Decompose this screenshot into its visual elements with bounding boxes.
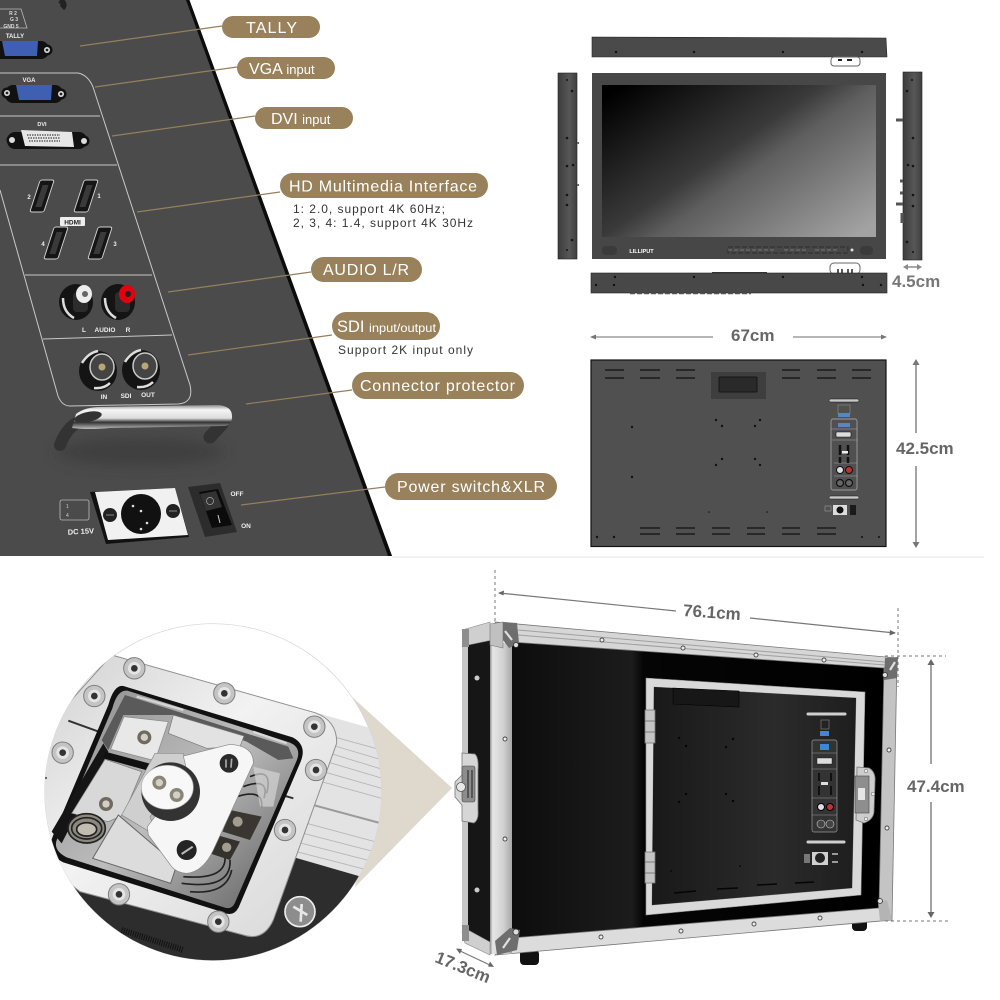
dimension: width 67cm: 67cm <box>731 326 774 345</box>
case side face <box>462 622 492 955</box>
callout: VGA input: VGA input <box>249 61 315 78</box>
connector group: SDI BNC <box>79 350 160 401</box>
dimension: case width 76.1cm <box>495 570 898 687</box>
panel: monitor left edge view <box>558 73 579 259</box>
black gap bar <box>104 752 149 770</box>
dark spring cavities <box>212 767 280 860</box>
panel: monitor front view <box>592 73 886 259</box>
icon: power rocker switch: OFF <box>230 491 244 498</box>
pointer: zoom wedge from latch to detail circle <box>350 695 452 887</box>
connector: VGA port: VGA <box>22 78 36 84</box>
case corners <box>490 622 898 955</box>
dimension: depth 4.5cm: 4.5cm <box>892 272 940 291</box>
icon: DC 15V terminal diagram: 4 <box>66 513 69 519</box>
text: HDMI version notes: 1: 2.0, support 4K 60Hz; <box>293 202 445 216</box>
callout: AUDIO L/R <box>168 257 422 292</box>
panel: monitor right edge view <box>896 72 922 260</box>
callout: Connector protector: Connector protector <box>360 378 516 395</box>
callout: HD Multimedia Interface: HD Multimedia Interface <box>289 178 477 196</box>
upper-left inner plate <box>111 717 168 761</box>
text: HDMI version notes <box>293 202 473 230</box>
divider between sections <box>392 556 984 558</box>
latch recess <box>51 686 303 914</box>
connector group: HDMI ports: 1 <box>97 194 101 200</box>
tally terminal block: G 3 <box>10 17 18 23</box>
callout: HD Multimedia Interface <box>137 173 488 212</box>
connector group: audio RCA <box>59 284 135 334</box>
panel: monitor rear close-up <box>0 0 392 556</box>
callout: TALLY <box>80 16 320 46</box>
tally terminal block <box>0 9 27 40</box>
plate rivets <box>52 658 327 932</box>
callout: AUDIO L/R: AUDIO L/R <box>323 262 409 279</box>
callout: DVI input <box>112 107 353 136</box>
connector: VGA port <box>2 78 66 103</box>
panel: latch detail circle <box>44 623 382 961</box>
connector group: HDMI ports: 3 <box>113 242 117 248</box>
callout: SDI input/output <box>188 312 440 355</box>
callout: DVI input: DVI input <box>271 111 331 128</box>
case latch: right <box>855 767 875 823</box>
mini connector panel <box>825 399 859 515</box>
top inner plate <box>168 715 244 748</box>
connector group: HDMI ports <box>27 180 117 259</box>
dimension: height 42.5cm: 42.5cm <box>896 439 954 458</box>
case door frame <box>646 678 865 915</box>
icon: DC 15V terminal diagram: DC 15V <box>68 526 94 537</box>
text: SDI note: Support 2K input only <box>338 343 473 357</box>
case main black face <box>505 636 890 945</box>
main latch cam <box>141 744 253 873</box>
callout: Connector protector <box>246 372 524 404</box>
black case surface <box>74 858 359 960</box>
callout: TALLY: TALLY <box>246 20 297 37</box>
callout: SDI input/output: SDI <box>337 318 365 336</box>
panel: monitor rear view <box>591 360 886 546</box>
extrusion rail behind latch <box>296 713 382 876</box>
dimension: case height 47.4cm <box>885 656 965 921</box>
connector group: audio RCA: L <box>82 327 86 334</box>
connector: tally port <box>0 41 52 59</box>
monitor rear inside door <box>652 687 856 905</box>
panel: monitor bottom edge view <box>591 263 887 294</box>
callout: SDI input/output: input/output <box>369 321 437 335</box>
connector group: audio RCA: AUDIO <box>95 327 115 334</box>
tally terminal block: GND 5 <box>3 24 19 30</box>
door connector panel <box>804 714 845 865</box>
connector group: HDMI ports: HDMI <box>64 220 81 226</box>
connector group: SDI BNC: IN <box>101 394 108 401</box>
panel: monitor top edge view <box>592 37 887 66</box>
callout: Power switch and XLR: Power switch&XLR <box>397 479 545 496</box>
tally terminal block: R 2 <box>9 11 17 17</box>
coil springs <box>68 774 268 892</box>
icon: XLR power connector <box>90 488 189 544</box>
icon: power rocker switch <box>188 483 251 537</box>
icon: power rocker switch: ON <box>241 523 251 530</box>
case feet <box>520 918 867 965</box>
dimension: width 67cm <box>590 326 887 345</box>
callout: Power switch and XLR <box>241 473 557 505</box>
connector group: audio RCA: R <box>126 327 131 334</box>
case screw <box>285 897 315 927</box>
dimension: case height 47.4cm: 47.4cm <box>907 777 965 796</box>
door hinges <box>645 710 655 883</box>
connector group: HDMI ports: 4 <box>41 242 45 248</box>
panel: flight case <box>455 622 898 965</box>
lower-left inner plate <box>72 759 142 822</box>
text: HDMI version notes: 2, 3, 4: 1.4, support 4K 30Hz <box>293 216 473 230</box>
connector group: SDI BNC: OUT <box>141 392 155 399</box>
dimension: height 42.5cm <box>896 359 954 548</box>
panel: monitor front view: LILLIPUT <box>629 249 654 255</box>
icon: DC 15V terminal diagram: 1 <box>66 504 69 510</box>
base slab <box>93 815 177 883</box>
connector: DVI port: DVI <box>37 122 47 128</box>
icon: connector protector handle <box>55 405 232 466</box>
connector group: SDI BNC: SDI <box>121 393 132 400</box>
support under cam <box>122 753 187 837</box>
callout: VGA input <box>95 57 335 87</box>
dimension: case width 76.1cm: 76.1cm <box>683 601 741 624</box>
icon: DC 15V terminal diagram <box>60 500 94 537</box>
latch plate <box>27 655 337 937</box>
case latch: left <box>455 753 478 823</box>
connector: DVI port <box>6 122 90 149</box>
dimension: case depth 17.3cm: 17.3cm <box>433 948 493 987</box>
case rails <box>490 622 897 955</box>
connector group: HDMI ports: 2 <box>27 195 31 201</box>
tally terminal block: TALLY <box>6 34 24 40</box>
